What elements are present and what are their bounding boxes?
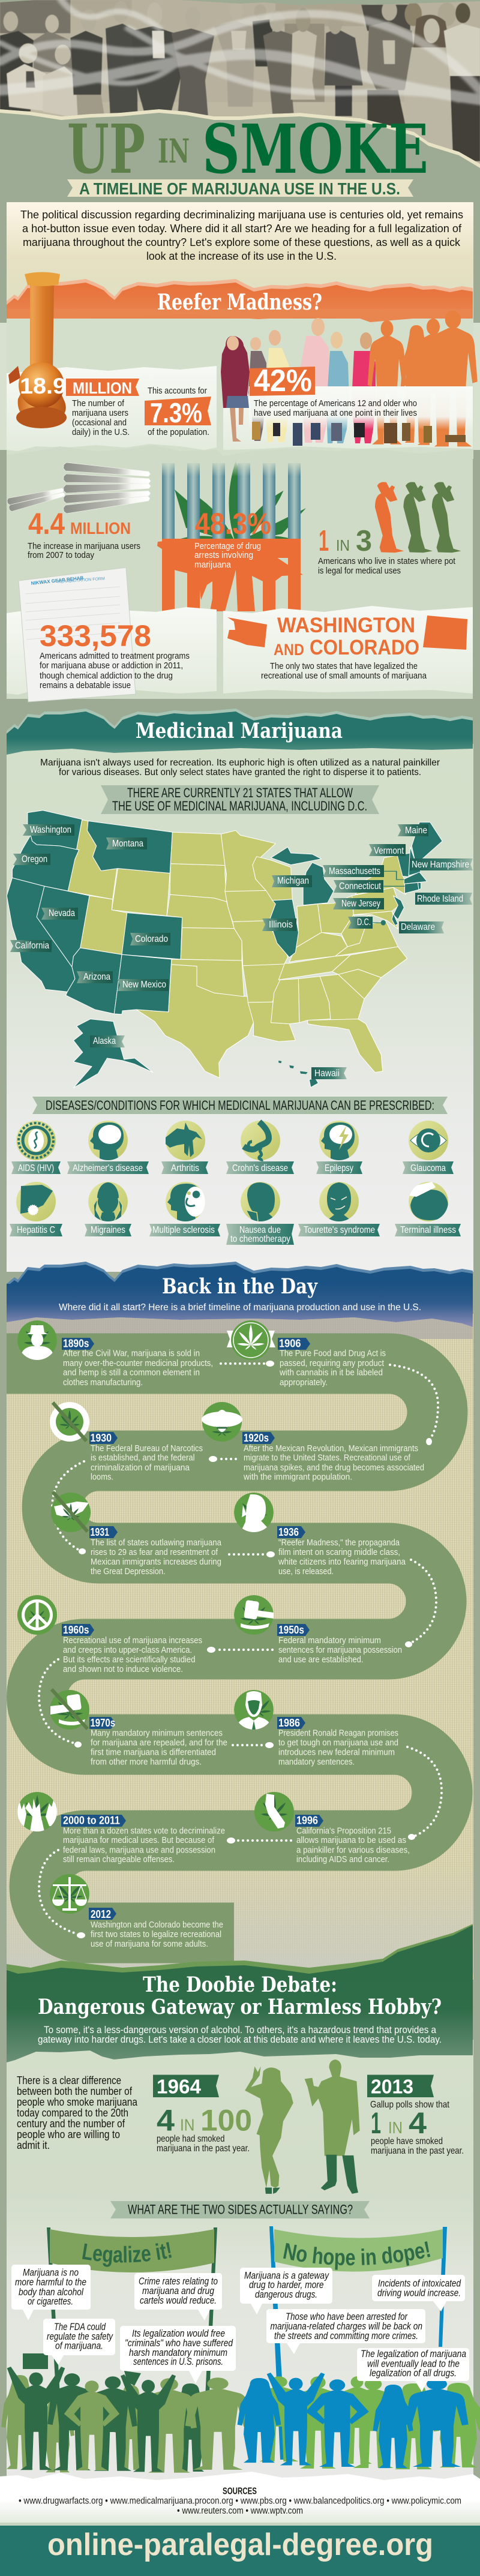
timeline entry: 1950s xyxy=(234,1595,402,1665)
timeline entry: 1930: 1930 xyxy=(90,1432,112,1444)
icon: Alzheimer's xyxy=(88,1121,128,1160)
stat: 1 in 3 with smoker silhouettes: is legal for medical uses xyxy=(318,566,401,576)
timeline entry: 2000 to 2011: More than a dozen states vote to decriminalize xyxy=(63,1826,225,1836)
timeline entry: 1986: introduces new federal minimum xyxy=(278,1747,395,1758)
callouts: legalize arguments: Marijuana is no xyxy=(23,2268,79,2278)
stat: Washington and Colorado: COLORADO xyxy=(310,636,419,659)
icon: hepatitis C liver xyxy=(16,1182,56,1221)
footer: site name: online-paralegal-degree.org xyxy=(47,2527,433,2562)
label: second row of conditions: Migraines xyxy=(91,1225,125,1235)
timeline entry: 1996 xyxy=(254,1792,410,1865)
timeline entry: 1960s: Recreational use of marijuana increases xyxy=(63,1635,202,1646)
callouts: legalize arguments: more harmful to the xyxy=(15,2277,86,2288)
timeline entry: 1890s: 1890s xyxy=(63,1338,89,1350)
banner: Legalize it: Legalize it! xyxy=(82,2242,172,2267)
subtitle ribbon: A TIMELINE OF MARIJUANA USE IN THE U.S. xyxy=(79,179,400,198)
ribbon: 21 states: THERE ARE CURRENTLY 21 STATES THAT ALLOW xyxy=(127,785,353,800)
timeline entry: 1986: to get tough on marijuana use and xyxy=(278,1737,398,1748)
map: United States medicinal marijuana states xyxy=(7,810,442,1088)
stat: 18.9 million users: daily) in the U.S. xyxy=(72,427,130,437)
stat: 1 in 3 with smoker silhouettes: Americans who live in states where pot xyxy=(318,556,456,566)
title: Up in Smoke: IN xyxy=(158,131,190,170)
illustration: rehabilitation form: NIKWAX GEAR REHAB xyxy=(31,575,84,586)
map labels: state names: Washington xyxy=(30,825,71,835)
map labels: state names: Arizona xyxy=(83,972,110,982)
timeline entry: 2012: first two states to legalize recreational xyxy=(91,1929,221,1939)
timeline entry: 1970s: 1970s xyxy=(90,1717,115,1729)
label: first row of conditions xyxy=(11,1161,454,1174)
timeline entry: 1930 xyxy=(50,1402,203,1482)
label: first row of conditions: Alzheimer's disease xyxy=(73,1163,143,1173)
stat: 2013 1 in 4: Gallup polls show that xyxy=(370,2100,449,2110)
timeline entry: 1890s: After the Civil War, marijuana is sold in xyxy=(63,1349,200,1358)
label: second row of conditions: Nausea due xyxy=(239,1225,281,1235)
stat: 1 in 3 with smoker silhouettes: 3 xyxy=(356,525,372,557)
illustration: group of young people and orange silhouettes xyxy=(221,311,478,450)
panel: reefer madness stats background xyxy=(0,318,480,459)
timeline entry: 1970s: from other more harmful drugs. xyxy=(91,1757,202,1767)
crowd: opponents xyxy=(238,2373,480,2469)
timeline entry: 1930: looms. xyxy=(91,1472,113,1482)
map labels: state names: Massachusetts xyxy=(329,866,380,876)
label: second row of conditions: Terminal illness xyxy=(400,1225,456,1235)
timeline entry: 1936: "Reefer Madness," the propaganda xyxy=(278,1538,400,1548)
stat: 18.9 million users: marijuana users xyxy=(72,408,128,418)
label: first row of conditions: Crohn's disease xyxy=(232,1163,288,1173)
timeline entry: 1920s: marijuana spikes, and the drug becomes associated xyxy=(244,1463,424,1473)
timeline entry: 1906: appropriately. xyxy=(280,1377,328,1388)
callouts: opponent arguments: Marijuana is a gateway xyxy=(244,2270,329,2281)
panel: intro text: The political discussion regarding decriminalizing marijuana use is centuries old, yet remains xyxy=(20,209,463,221)
banner: No hope in dope: No hope in dope! xyxy=(283,2241,430,2270)
text block: clear difference: between both the number of xyxy=(17,2085,133,2097)
callouts: opponent arguments: dangerous drugs. xyxy=(255,2289,317,2300)
timeline entry: 1960s: But its effects are scientifically studied xyxy=(63,1655,196,1665)
timeline entry: 1890s: clothes manufacturing. xyxy=(63,1377,143,1388)
stat: 1 in 3 with smoker silhouettes: IN xyxy=(336,536,350,554)
icon: epilepsy xyxy=(319,1121,359,1160)
timeline entry: 1890s: many over-the-counter medicinal products, xyxy=(63,1358,213,1368)
timeline entry: 1931: rises to 29 as fear and resentment of xyxy=(91,1547,218,1557)
stat: 2013 1 in 4: 1 xyxy=(371,2106,381,2140)
timeline entry: 1960s: and creeps into upper-class America. xyxy=(63,1645,192,1655)
stat: 7.3 percent of the population: This accounts for xyxy=(148,386,207,396)
timeline entry: 1986 xyxy=(234,1690,398,1767)
stat: 48.3 percent of arrests: Percentage of drug xyxy=(194,541,261,551)
timeline entry: 1920s: After the Mexican Revolution, Mexican immigrants xyxy=(244,1443,418,1454)
stat: 42 percent: have used marijuana at one point in their lives xyxy=(254,408,417,418)
stat: 48.3 percent of arrests: 48.3% xyxy=(195,507,271,541)
timeline entry: 1936: film intent on scaring middle class, xyxy=(278,1547,400,1557)
map labels: state names xyxy=(10,824,473,1079)
panel: sources: • www.reuters.com • www.wptv.com xyxy=(177,2506,303,2516)
icon: nausea xyxy=(241,1182,280,1221)
stat: 1964 4 in 100: IN xyxy=(180,2115,194,2134)
timeline entry: 1890s: and hemp is still a common element in xyxy=(63,1368,200,1377)
callouts: legalize arguments: cartels would reduce. xyxy=(140,2295,217,2306)
timeline entry: 1970s: Many mandatory minimum sentences xyxy=(91,1728,223,1739)
timeline entry: 1906 xyxy=(227,1320,386,1388)
callouts: opponent arguments: the streets and committing more crimes. xyxy=(274,2331,418,2341)
map labels: state names: Oregon xyxy=(22,854,47,864)
stat: 4.4 million: from 2007 to today xyxy=(28,550,94,560)
stat: 1964 4 in 100: 100 xyxy=(200,2103,252,2137)
callouts: opponent arguments xyxy=(240,2268,469,2392)
icon: terminal illness xyxy=(409,1182,448,1221)
stat: 333,578: remains a debatable issue xyxy=(40,680,131,690)
timeline entry: 1906: with cannabis in it be labeled xyxy=(279,1368,383,1377)
stat: 18.9 million users: MILLION xyxy=(73,379,132,397)
section banner: The Doobie Debate: The Doobie Debate: xyxy=(143,1972,337,1997)
timeline entry: 1931 xyxy=(51,1492,222,1577)
timeline entry: 1906: passed, requiring any product xyxy=(280,1358,385,1368)
banner: Legalize it xyxy=(47,2227,217,2458)
illustration: woman and man silhouettes xyxy=(245,2059,359,2194)
stat: 1964 4 in 100: 4 xyxy=(157,2103,175,2137)
stat: 4.4 million: MILLION xyxy=(70,519,131,538)
illustration: rehabilitation form: REHABILITATION FORM xyxy=(58,577,105,584)
label: first row of conditions: Arthritis xyxy=(171,1163,199,1173)
timeline entry: 1960s xyxy=(17,1595,202,1674)
text block: medicinal intro xyxy=(40,758,440,777)
callouts: legalize arguments: The FDA could xyxy=(54,2322,106,2332)
map labels: state names: New Hampshire xyxy=(412,860,469,870)
timeline dotted arrows xyxy=(39,1361,442,1938)
icon: Crohn's intestine xyxy=(241,1121,280,1160)
section banner: The Doobie Debate: To some, it's a less-dangerous version of alcohol. To others, it's a hazardous trend that provides a xyxy=(44,2024,436,2035)
timeline entry: 2012: Washington and Colorado become the xyxy=(91,1920,223,1930)
timeline entry: 1920s: with the immigrant population. xyxy=(243,1472,352,1482)
panel: intro text: look at the increase of its use in the U.S. xyxy=(146,250,337,262)
timeline entry: 1930: is established, and the federal xyxy=(91,1453,194,1463)
panel: sources: SOURCES xyxy=(223,2486,257,2497)
text block: clear difference: There is a clear difference xyxy=(17,2074,121,2086)
panel: sources xyxy=(0,2472,480,2523)
map labels: state names: Colorado xyxy=(135,934,168,944)
timeline entry: 1906: 1906 xyxy=(279,1338,301,1350)
stat: 18.9 million users xyxy=(20,374,139,437)
section banner: The Doobie Debate xyxy=(7,1924,473,2067)
stat: Washington and Colorado: AND xyxy=(274,641,304,659)
timeline entry: 2012: use of marijuana for some adults. xyxy=(91,1939,208,1949)
callouts: legalize arguments: regulate the safety xyxy=(47,2331,113,2342)
map labels: state names: Illinois xyxy=(269,920,293,930)
header photo collage xyxy=(0,0,480,168)
text block: medicinal intro: Marijuana isn't always used for recreation. Its euphoric high is often utilized as a natural painkiller xyxy=(40,758,440,768)
timeline entry: 1931: The list of states outlawing marijuana xyxy=(91,1538,222,1548)
callouts: legalize arguments xyxy=(11,2265,236,2383)
stat: 18.9 million users: (occasional and xyxy=(72,418,127,428)
label: second row of conditions: Multiple sclerosis xyxy=(152,1225,215,1235)
callouts: opponent arguments: Incidents of intoxicated xyxy=(378,2278,461,2289)
timeline entry: 1996: allows marijuana to be used as xyxy=(296,1835,406,1845)
stat: 333,578: for marijuana abuse or addiction in 2011, xyxy=(40,660,183,671)
icon: Tourette's xyxy=(319,1182,359,1221)
stat: 48.3 percent of arrests: marijuana xyxy=(194,560,232,570)
icon: multiple sclerosis xyxy=(166,1182,205,1221)
crowd: legalize supporters xyxy=(1,2353,250,2473)
stat: 1964 4 in 100: people had smoked xyxy=(157,2134,224,2144)
timeline entry: 1936: 1936 xyxy=(278,1526,299,1538)
ribbon: two sides: WHAT ARE THE TWO SIDES ACTUALLY SAYING? xyxy=(128,2202,353,2217)
section banner: Medicinal Marijuana xyxy=(7,708,473,755)
timeline entry: 1970s xyxy=(50,1689,227,1767)
timeline entry: 1920s: 1920s xyxy=(244,1432,269,1444)
timeline entry: 2000 to 2011: marijuana for medical uses. But because of xyxy=(63,1835,215,1845)
text block: clear difference: people who smoke marijuana xyxy=(17,2096,138,2108)
stat: 2013 1 in 4: 2013 xyxy=(371,2076,413,2097)
timeline entry: 1996: California's Proposition 215 xyxy=(296,1826,391,1836)
stat: 2013 1 in 4 xyxy=(367,2074,464,2156)
footer: site name xyxy=(0,2523,480,2576)
timeline entry: 1950s: and use are established. xyxy=(278,1655,364,1665)
timeline entry: 2012: 2012 xyxy=(91,1908,111,1920)
text block: clear difference: today compared to the 20th xyxy=(17,2107,128,2119)
map labels: state names: Alaska xyxy=(93,1036,116,1046)
callouts: legalize arguments: marijuana and drug xyxy=(142,2286,215,2296)
illustration: rehabilitation form xyxy=(19,568,136,702)
stat: 4.4 million: 4.4 xyxy=(28,507,65,541)
panel: intro text: marijuana throughout the country? Let's explore some of these questions, as well as a quick xyxy=(23,236,461,248)
timeline entry: 1970s: first time marijuana is differentiated xyxy=(91,1747,216,1758)
stat: 2013 1 in 4: IN xyxy=(388,2118,403,2137)
map labels: state names: California xyxy=(15,941,49,951)
timeline entry: 1960s: and shown not to induce violence. xyxy=(63,1664,183,1674)
panel: arrests and users background xyxy=(7,445,473,699)
stat: 1 in 3 with smoker silhouettes: 1 xyxy=(319,525,329,557)
banner: No hope in dope xyxy=(269,2226,447,2460)
title: Up in Smoke: UP xyxy=(67,110,145,189)
stat: 2013 1 in 4: people have smoked xyxy=(371,2136,443,2146)
map labels: state names: Montana xyxy=(112,839,143,849)
label: first row of conditions: AIDS (HIV) xyxy=(18,1163,54,1173)
map labels: state names: Vermont xyxy=(374,846,404,856)
timeline entry: 2000 to 2011: still remain chargeable offenses. xyxy=(63,1854,175,1865)
map labels: state names: New Jersey xyxy=(341,899,380,909)
callouts: legalize arguments: of marijuana. xyxy=(55,2341,103,2352)
text block: medicinal intro: for various diseases. But only select states have granted the right to disperse it to patients. xyxy=(59,767,421,777)
label: second row of conditions: Tourette's syndrome xyxy=(304,1225,375,1235)
timeline entry: 1931: Mexican immigrants increases during xyxy=(91,1557,221,1567)
text block: clear difference: admit it. xyxy=(17,2139,50,2151)
section banner: Medicinal Marijuana: Medicinal Marijuana xyxy=(136,719,343,743)
stat: 42 percent: 42% xyxy=(254,364,312,398)
timeline entry: 1950s: Federal mandatory minimum xyxy=(278,1635,381,1646)
timeline entry: 1920s xyxy=(202,1402,424,1482)
map labels: state names: Connecticut xyxy=(339,881,381,891)
timeline entry: 1931: 1931 xyxy=(90,1526,109,1538)
stat: 333,578 xyxy=(40,619,190,690)
stat: 7.3 percent of the population: of the population. xyxy=(148,427,209,437)
stat: 1964 4 in 100 xyxy=(153,2074,252,2154)
timeline entry: 1936 xyxy=(234,1493,406,1577)
timeline entry: 1950s: 1950s xyxy=(278,1624,304,1636)
panel: doobie debate lower background xyxy=(7,2040,473,2484)
section banner: The Doobie Debate: gateway into harder drugs. Let's take a closer look at this debate and where it leaves the U.S. today. xyxy=(38,2034,442,2045)
callouts: opponent arguments: legalization of all drugs. xyxy=(370,2368,457,2379)
map labels: state names: D.C. xyxy=(357,917,371,927)
label: first row of conditions: Glaucoma xyxy=(410,1163,446,1173)
stat: 4.4 million xyxy=(28,507,140,560)
section banner: Back in the Day: Back in the Day xyxy=(162,1274,319,1299)
panel: burlap timeline background xyxy=(7,1314,473,1980)
timeline entry: 1930: The Federal Bureau of Narcotics xyxy=(91,1443,203,1454)
timeline entry: 1996: including AIDS and cancer. xyxy=(296,1854,389,1865)
timeline entry: 1950s: sentences for marijuana possession xyxy=(278,1645,402,1655)
callouts: legalize arguments: or cigarettes. xyxy=(28,2296,73,2307)
icon: migraines xyxy=(88,1182,128,1221)
section banner: The Doobie Debate: Dangerous Gateway or Harmless Hobby? xyxy=(38,1995,442,2019)
callouts: opponent arguments: drug to harder, more xyxy=(249,2280,324,2290)
stat: 7.3 percent of the population: 7.3% xyxy=(150,397,202,428)
stat: Washington and Colorado: The only two states that have legalized the xyxy=(270,661,418,671)
section banner: Reefer Madness xyxy=(7,279,473,322)
timeline road xyxy=(7,1364,442,1933)
timeline entry: 1936: use, is released. xyxy=(278,1566,334,1577)
label: first row of conditions: Epilepsy xyxy=(325,1163,353,1173)
section banner: Reefer Madness: Reefer Madness? xyxy=(157,290,322,315)
stat: 42 percent xyxy=(250,364,417,418)
callouts: legalize arguments: Crime rates relating to xyxy=(139,2276,218,2287)
timeline entry: 2012 xyxy=(50,1874,223,1949)
icon: arthritis hand xyxy=(166,1121,205,1160)
stat: 2013 1 in 4: 4 xyxy=(409,2106,427,2140)
callouts: opponent arguments: driving would increase. xyxy=(377,2288,461,2299)
timeline entry: 2000 to 2011: federal laws, marijuana use and possession xyxy=(63,1845,215,1855)
stat: 48.3 percent of arrests: arrests involving xyxy=(194,550,253,560)
stat: 333,578: Americans admitted to treatment programs xyxy=(40,651,190,661)
callouts: legalize arguments: sentences in U.S. prisons. xyxy=(133,2356,223,2367)
callouts: legalize arguments: harsh mandatory minimum xyxy=(129,2347,227,2358)
panel: white torn panels xyxy=(7,606,473,695)
timeline entry: 1920s: migrate to the United States. Recreational use of xyxy=(244,1453,411,1463)
icon: AIDS xyxy=(16,1121,56,1160)
illustration: rolled joints xyxy=(7,463,151,514)
stat: Washington and Colorado xyxy=(227,614,467,681)
map labels: state names: Nevada xyxy=(49,908,75,918)
callouts: opponent arguments: will eventually lead to the xyxy=(367,2359,460,2370)
callouts: legalize arguments: Its legalization would free xyxy=(132,2328,225,2339)
icon: orange bong xyxy=(8,272,67,428)
panel: intro text: a hot-button issue even today. Where did it all start? Are we heading for a full legalization of xyxy=(22,223,462,235)
callouts: legalize arguments: body than alcohol xyxy=(19,2287,84,2298)
timeline entry: 2000 to 2011 xyxy=(17,1792,225,1865)
timeline entry: 1960s: 1960s xyxy=(63,1624,89,1636)
label: second row of conditions xyxy=(10,1224,461,1245)
stat: 18.9 million users: 18.9 xyxy=(20,374,66,398)
timeline entry: 1996: 1996 xyxy=(296,1814,318,1826)
stat: 7.3 percent of the population xyxy=(145,386,211,437)
label: second row of conditions: Hepatitis C xyxy=(17,1225,55,1235)
timeline entry: 1970s: for marijuana are repealed, and for the xyxy=(91,1737,227,1748)
timeline entry: 1986: mandatory sentences. xyxy=(278,1757,355,1767)
title: Up in Smoke xyxy=(67,110,428,189)
timeline entry: 1986: President Ronald Reagan promises xyxy=(278,1728,398,1739)
stat: 18.9 million users: The number of xyxy=(72,398,125,409)
text block: clear difference xyxy=(17,2074,138,2151)
stat: 1964 4 in 100: 1964 xyxy=(157,2076,202,2097)
timeline entry: 1930: criminalization of marijuana xyxy=(91,1463,190,1473)
map labels: state names: New Mexico xyxy=(122,980,166,990)
stat: 333,578: though chemical addiction to the drug xyxy=(40,671,173,681)
panel: medicinal marijuana background xyxy=(7,744,473,1272)
timeline entry: 1986: 1986 xyxy=(278,1717,300,1729)
timeline entry: 1906: The Pure Food and Drug Act is xyxy=(280,1349,386,1358)
map labels: state names: Michigan xyxy=(277,876,309,886)
stat: 48.3 percent of arrests xyxy=(194,507,271,570)
timeline entry: 1890s xyxy=(17,1320,213,1388)
title: Up in Smoke: SMOKE xyxy=(202,110,428,189)
timeline entry: 1931: the Great Depression. xyxy=(91,1566,166,1577)
section banner: Back in the Day: Where did it all start? Here is a brief timeline of marijuana production and use in the U.S. xyxy=(59,1302,421,1313)
text block: clear difference: people who are willing to xyxy=(17,2128,120,2140)
section banner: Back in the Day xyxy=(7,1262,473,1339)
stat: 1964 4 in 100: marijuana in the past year. xyxy=(157,2143,250,2154)
timeline entry: 1936: white citizens into fearing marijuana xyxy=(278,1557,406,1567)
panel: intro text xyxy=(7,202,473,325)
ribbon: 21 states: THE USE OF MEDICINAL MARIJUANA, INCLUDING D.C. xyxy=(112,798,367,813)
map labels: state names: Maine xyxy=(405,825,427,836)
stat: 4.4 million: The increase in marijuana users xyxy=(28,541,140,551)
stat: Washington and Colorado: WASHINGTON xyxy=(277,614,415,637)
illustration: cannabis leaf behind jail bars xyxy=(157,460,306,611)
timeline entry: 1996: a painkiller for various diseases, xyxy=(296,1845,410,1855)
stat: 1 in 3 with smoker silhouettes xyxy=(318,482,461,576)
icon: glaucoma eye xyxy=(409,1121,448,1160)
map labels: state names: Hawaii xyxy=(314,1068,340,1079)
label: second row of conditions: to chemotherapy xyxy=(230,1234,290,1244)
stat: 333,578: 333,578 xyxy=(40,619,151,653)
text block: clear difference: century and the number of xyxy=(17,2118,125,2130)
stat: Washington and Colorado: recreational use of small amounts of marijuana xyxy=(261,671,427,681)
stat: 42 percent: The percentage of Americans 12 and older who xyxy=(254,398,417,409)
ribbon: 21 states xyxy=(101,785,379,814)
map labels: state names: Rhode Island xyxy=(417,894,463,904)
ribbon: two sides xyxy=(110,2201,370,2218)
callouts: opponent arguments: Those who have been arrested for xyxy=(286,2311,408,2322)
map labels: state names: Delaware xyxy=(401,922,435,932)
callouts: legalize arguments: "criminals" who have suffered xyxy=(125,2338,233,2349)
timeline entry: 2000 to 2011: 2000 to 2011 xyxy=(63,1814,120,1826)
callouts: opponent arguments: marijuana-related charges will be back on xyxy=(270,2321,422,2332)
